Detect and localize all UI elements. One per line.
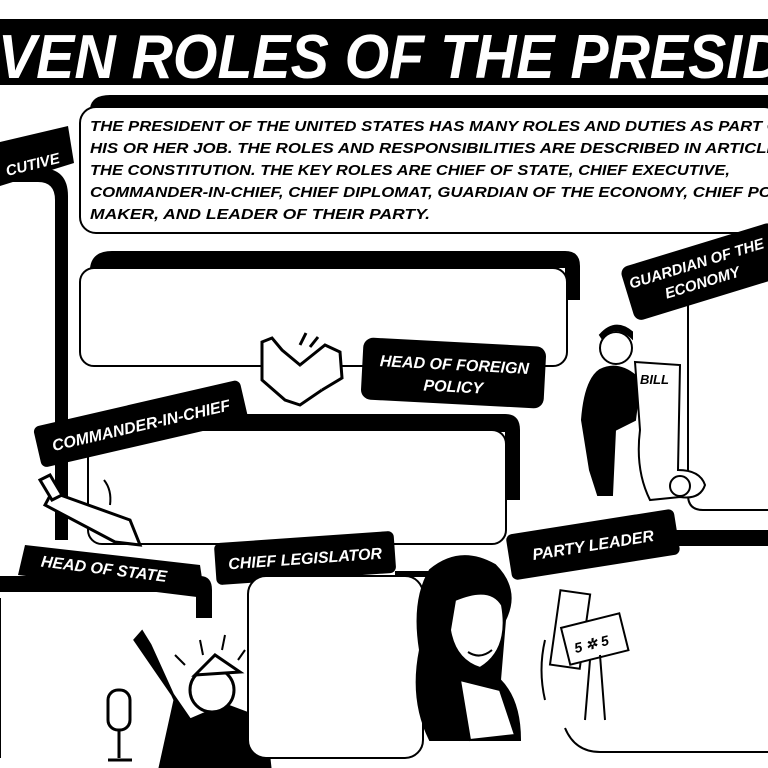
label: executive	[0, 126, 74, 186]
label: head of foreign policy	[361, 337, 546, 409]
intro text: THE CONSTITUTION. THE KEY ROLES ARE CHIEF OF STATE, CHIEF EXECUTIVE,	[90, 163, 730, 179]
label: head of state	[0, 545, 212, 618]
label: party leader	[505, 509, 768, 581]
panel: chief legislator	[248, 574, 440, 758]
intro text: MAKER, AND LEADER OF THEIR PARTY.	[90, 207, 430, 223]
panel: executive connector	[0, 168, 68, 540]
icon: handshake	[262, 333, 342, 405]
panel: foreign policy	[80, 251, 580, 366]
panel: commander-in-chief	[88, 414, 520, 544]
label: head of state: HEAD OF STATE	[40, 554, 169, 586]
label: commander-in-chief: COMMANDER-IN-CHIEF	[51, 397, 233, 455]
label: party leader: PARTY LEADER	[531, 528, 656, 564]
label: executive: CUTIVE	[4, 150, 62, 180]
label: chief legislator: CHIEF LEGISLATOR	[228, 546, 383, 573]
icon: money in hands: 5 ✲ 5	[572, 632, 611, 656]
label: guardian of the economy: GUARDIAN OF THE	[627, 235, 767, 293]
icon: man with bill	[582, 326, 705, 500]
panel: party leader box	[565, 728, 768, 752]
label: head of foreign policy: HEAD OF FOREIGN	[379, 353, 530, 378]
label: chief legislator	[214, 531, 396, 585]
intro text: COMMANDER-IN-CHIEF, CHIEF DIPLOMAT, GUARDIAN OF THE ECONOMY, CHIEF POLICY	[90, 185, 768, 201]
intro text: HIS OR HER JOB. THE ROLES AND RESPONSIBILITIES ARE DESCRIBED IN ARTICLE II OF	[90, 141, 768, 157]
label: head of foreign policy: POLICY	[423, 377, 485, 398]
icon: man with microphone	[108, 632, 270, 768]
label: guardian of the economy: ECONOMY	[663, 263, 744, 303]
label: guardian of the economy	[620, 221, 768, 322]
panel: head of state box	[0, 598, 1, 758]
icon: man with bill: BILL	[640, 372, 669, 387]
intro text: THE PRESIDENT OF THE UNITED STATES HAS MANY ROLES AND DUTIES AS PART OF	[90, 119, 768, 135]
icon: woman	[417, 556, 520, 740]
panel: intro text box	[80, 95, 768, 233]
icon: sword	[40, 475, 140, 545]
label: commander-in-chief	[33, 379, 249, 468]
panel: guardian	[688, 300, 768, 510]
intro text	[90, 119, 768, 223]
icon: money in hands	[542, 590, 628, 720]
